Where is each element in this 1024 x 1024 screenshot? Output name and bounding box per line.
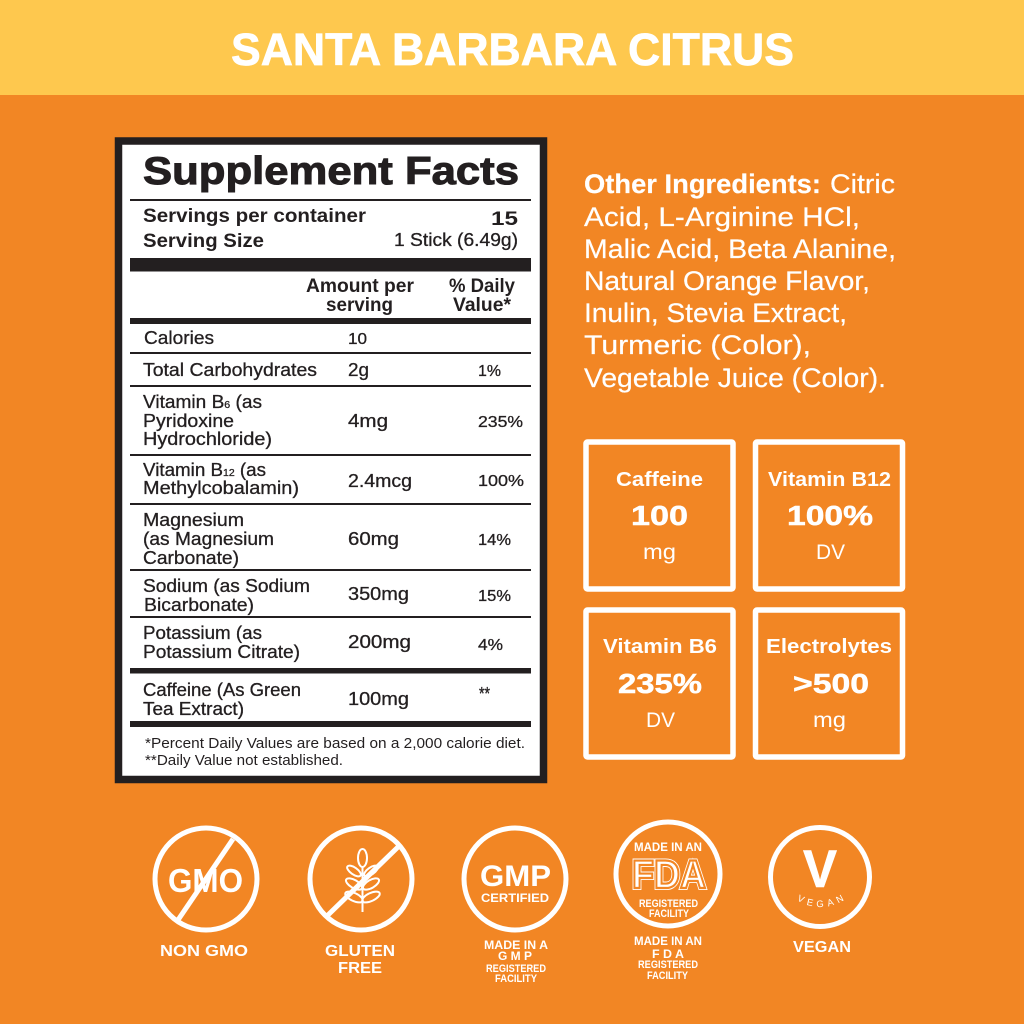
- other ingredients text: Vegetable Juice (Color).: [584, 363, 886, 393]
- badge: non gmo: NON GMO: [160, 943, 248, 960]
- badge: gmp certified: FACILITY: [495, 973, 538, 985]
- row: calories: 10: [348, 331, 367, 348]
- icon: wheat: [344, 849, 381, 912]
- stat box: electrolytes: >500: [793, 668, 869, 699]
- row: caffeine: **: [479, 684, 490, 704]
- row: total carbohydrates: [143, 360, 501, 380]
- row: sodium: Bicarbonate): [144, 595, 254, 615]
- row: vitamin b6: 235%: [478, 414, 523, 431]
- row: vitamin b12: 2.4mcg: [348, 471, 412, 491]
- row: potassium: Potassium (as: [143, 623, 262, 643]
- heading: supplement facts: Supplement Facts: [143, 150, 519, 193]
- row: sodium: 15%: [478, 588, 511, 605]
- stat box: electrolytes: mg: [813, 709, 846, 732]
- stat box: vitamin b6: DV: [646, 709, 675, 732]
- row: vitamin b6: Pyridoxine: [143, 411, 234, 431]
- column headers: Value*: [453, 295, 512, 316]
- stat box: caffeine: mg: [643, 541, 676, 564]
- row: vitamin b12: 100%: [478, 473, 524, 490]
- servings info: Servings per container: [143, 206, 367, 227]
- badge: non gmo: [155, 828, 257, 960]
- row: sodium: 350mg: [348, 584, 409, 604]
- badge: gmp certified: GMP: [480, 860, 551, 893]
- badge: fda registered: MADE IN AN: [634, 842, 702, 854]
- badge: gmp certified: [464, 828, 566, 985]
- servings info: 1 Stick (6.49g): [394, 230, 518, 250]
- badge: non gmo: GMO: [168, 862, 243, 899]
- badge: gluten free: [310, 828, 412, 977]
- row: magnesium: 14%: [478, 532, 511, 549]
- badge: gmp certified: REGISTERED: [486, 963, 546, 975]
- row: vitamin b12: [143, 460, 524, 498]
- row: potassium: 4%: [478, 637, 503, 654]
- row: vitamin b12: Vitamin B 12 (as: [143, 460, 266, 480]
- row: caffeine: [143, 680, 490, 719]
- other ingredients text: [584, 169, 896, 393]
- stat box: vitamin b12: Vitamin B12: [768, 469, 891, 491]
- row: vitamin b6: 4mg: [348, 411, 388, 431]
- row: total carbohydrates: 1%: [478, 363, 501, 380]
- stat box: caffeine: Caffeine: [616, 469, 703, 491]
- stat box: vitamin b12: DV: [816, 541, 845, 564]
- row: magnesium: 60mg: [348, 529, 399, 549]
- row: potassium: 200mg: [348, 632, 411, 652]
- column headers: % Daily: [449, 276, 515, 297]
- badge: fda registered: REGISTERED: [639, 898, 698, 910]
- row: magnesium: Magnesium: [143, 510, 244, 530]
- servings info: [143, 206, 519, 252]
- row: sodium: [143, 576, 511, 615]
- row: vitamin b6: Hydrochloride): [143, 429, 272, 449]
- row: sodium: Sodium (as Sodium: [143, 576, 310, 596]
- row: magnesium: Carbonate): [143, 548, 239, 568]
- stat box: electrolytes: Electrolytes: [766, 636, 892, 658]
- title: SANTA BARBARA CITRUS: [231, 24, 794, 75]
- badge: gluten free: FREE: [338, 960, 382, 977]
- badge: gluten free: GLUTEN: [325, 943, 395, 960]
- badge: fda registered: FACILITY: [647, 970, 689, 982]
- stat box: caffeine: 100: [631, 500, 688, 531]
- row: potassium: [143, 623, 503, 662]
- servings info: 15: [491, 209, 519, 230]
- badge: gmp certified: MADE IN A: [484, 938, 548, 952]
- row: vitamin b6: Vitamin B 6 (as: [143, 392, 262, 412]
- other ingredients text: Other Ingredients:: [584, 169, 821, 199]
- servings info: Serving Size: [143, 231, 264, 252]
- badge: fda registered: [616, 822, 720, 982]
- header band: [0, 0, 1024, 95]
- stat box: caffeine: [586, 442, 733, 589]
- row: magnesium: [143, 510, 511, 568]
- badge: fda registered: MADE IN AN: [634, 934, 702, 948]
- column headers: serving: [326, 295, 393, 316]
- row: vitamin b12: Methylcobalamin): [143, 478, 299, 498]
- stat box: vitamin b6: [586, 610, 733, 757]
- row: calories: [144, 328, 367, 348]
- row: vitamin b6: [143, 392, 523, 449]
- row: potassium: Potassium Citrate): [143, 642, 300, 662]
- stat box: vitamin b12: 100%: [787, 500, 873, 531]
- column headers: Amount per: [306, 276, 415, 297]
- other ingredients text: Inulin, Stevia Extract,: [584, 298, 847, 328]
- stat box: electrolytes: [756, 610, 902, 757]
- other ingredients text: Malic Acid, Beta Alanine,: [584, 234, 896, 264]
- stat box: vitamin b6: 235%: [618, 668, 702, 699]
- badge: fda registered: REGISTERED: [638, 959, 698, 971]
- other ingredients text: Natural Orange Flavor,: [584, 266, 870, 296]
- footnotes: **Daily Value not established.: [145, 753, 343, 769]
- row: caffeine: 100mg: [348, 689, 409, 709]
- column headers: [306, 276, 515, 316]
- row: total carbohydrates: Total Carbohydrates: [143, 360, 317, 380]
- stat box: vitamin b12: [756, 442, 902, 589]
- badge: vegan: VEGAN: [793, 939, 851, 956]
- badge: fda registered: FACILITY: [649, 908, 690, 920]
- other ingredients text: Acid, L-Arginine HCl,: [584, 202, 860, 232]
- row: caffeine: Tea Extract): [143, 699, 244, 719]
- badge: gmp certified: CERTIFIED: [481, 893, 549, 905]
- curved vegan text: VEGAN: [799, 894, 844, 908]
- badge: vegan: [768, 825, 872, 956]
- row: calories: Calories: [144, 328, 214, 348]
- footnotes: [145, 736, 525, 769]
- icon: v mark: V: [803, 840, 837, 899]
- row: total carbohydrates: 2g: [348, 360, 369, 380]
- footnotes: *Percent Daily Values are based on a 2,000 calorie diet.: [145, 736, 525, 752]
- panel: supplement facts: [118, 141, 544, 780]
- stat box: vitamin b6: Vitamin B6: [603, 636, 717, 658]
- row: magnesium: (as Magnesium: [143, 529, 274, 549]
- row: caffeine: Caffeine (As Green: [143, 680, 301, 700]
- icon: fda logo: FDA: [632, 853, 706, 897]
- other ingredients text: Citric: [830, 169, 895, 199]
- badge: gmp certified: G M P: [498, 949, 532, 963]
- badge: fda registered: F D A: [652, 947, 684, 961]
- other ingredients text: Turmeric (Color),: [584, 330, 811, 360]
- icon: fda logo: FDA: [632, 853, 706, 897]
